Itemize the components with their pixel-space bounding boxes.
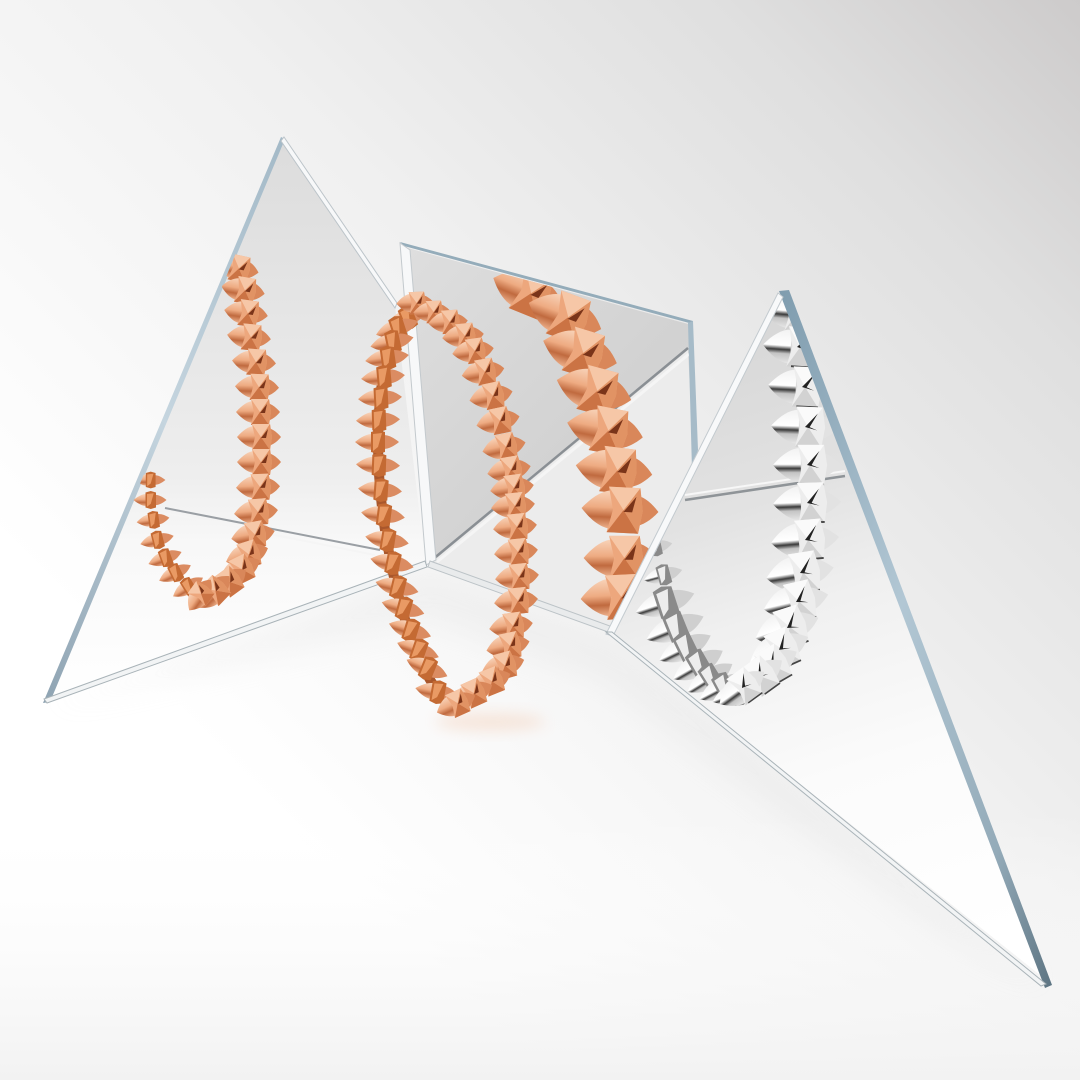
reflection: large rose gold bracelet (485, 257, 660, 621)
right glass edge (688, 321, 698, 470)
bottom bright edge (606, 632, 1046, 986)
upper right bright edge (281, 137, 397, 308)
reflection: white gold bracelet in right mirror (631, 290, 842, 718)
top glass edge (400, 242, 693, 324)
lower edge (428, 561, 610, 632)
blue right edge (779, 290, 1052, 988)
panel: right triangular mirror (612, 296, 1040, 975)
reflection of floor line (685, 476, 845, 500)
panel: left triangular mirror (43, 137, 427, 703)
mirror reflection line (432, 348, 688, 560)
bracelet: free-standing rose gold (355, 291, 540, 724)
bottom bright edge (44, 561, 427, 703)
reflection: rose gold bracelet in left mirror (134, 251, 281, 617)
panel: centre mirror (400, 242, 698, 632)
left bright edge (400, 243, 436, 565)
left bright edge (606, 293, 783, 636)
floor shadows (50, 570, 1045, 985)
left glass edge (43, 137, 285, 703)
reflection of floor line (165, 508, 380, 550)
right triangle glass edges (606, 290, 1052, 988)
